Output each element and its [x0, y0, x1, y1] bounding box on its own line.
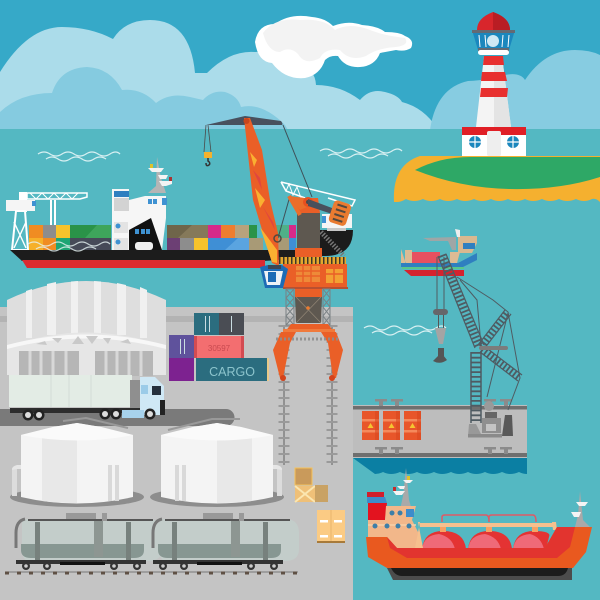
superstructure [112, 157, 172, 250]
container label: CARGO [209, 365, 255, 379]
dockside crane [204, 116, 355, 381]
small ship [401, 229, 477, 276]
lattice legs [286, 289, 330, 325]
pink pipes [442, 515, 536, 522]
sea [0, 129, 600, 600]
train track [5, 572, 298, 573]
hazard stripe deck [279, 257, 346, 264]
wheels [22, 408, 156, 420]
counterweight [328, 199, 352, 227]
bollards [375, 399, 512, 454]
cab [140, 377, 164, 415]
harbour crane [433, 254, 522, 438]
container number: 30597 [208, 344, 231, 353]
grass [415, 157, 600, 189]
bridge [368, 506, 419, 548]
containers aft [167, 225, 296, 250]
gas tanker [366, 468, 592, 580]
main boom [244, 118, 281, 266]
crane pedestal [295, 289, 322, 323]
blue cab [260, 265, 288, 288]
storage tank right [150, 419, 284, 507]
keeper house [462, 127, 526, 156]
machine house [289, 196, 352, 258]
sky background [0, 0, 600, 130]
cargo boxes [295, 468, 345, 543]
jib beam [206, 116, 282, 125]
pier [353, 399, 527, 474]
lighthouse [462, 12, 526, 156]
lantern room [472, 30, 515, 50]
rigging [437, 257, 520, 410]
storage tank left [10, 418, 144, 507]
funnel [367, 492, 387, 520]
lattice jib [438, 254, 522, 381]
road [0, 409, 234, 426]
tower [476, 56, 511, 127]
hangar [7, 281, 166, 376]
lattice brace [321, 232, 344, 256]
rear arm lattice [281, 182, 355, 206]
hook block [433, 309, 448, 363]
gantry portal [273, 324, 343, 381]
mast [471, 352, 481, 423]
containers fore [29, 225, 111, 250]
tank wagon left [16, 513, 162, 570]
rear ship stern [320, 230, 353, 256]
island [394, 156, 600, 202]
tank wagon right [153, 513, 299, 570]
deck pipe [415, 522, 557, 548]
dome [477, 12, 510, 30]
truck [9, 375, 165, 420]
pale cloud bank [0, 20, 438, 130]
quay ground [0, 307, 527, 600]
boom rigging [278, 125, 312, 238]
aft mast [393, 468, 413, 510]
operator platform [283, 264, 348, 289]
waterline wave [28, 242, 110, 251]
gas domes [422, 531, 549, 549]
containers stack [169, 313, 269, 381]
right cloud bank [430, 50, 600, 130]
deck crane [6, 192, 87, 250]
hull [10, 250, 297, 261]
oil drums [362, 411, 421, 440]
container ship [6, 157, 297, 268]
hook line [204, 125, 212, 166]
rail tracks [284, 325, 332, 465]
fore mast [571, 491, 590, 527]
mid cloud bank [0, 67, 288, 130]
white cloud [255, 16, 412, 78]
hull [366, 527, 592, 580]
winch housing [468, 401, 513, 438]
wave lines [38, 149, 446, 335]
trailer [9, 375, 132, 407]
